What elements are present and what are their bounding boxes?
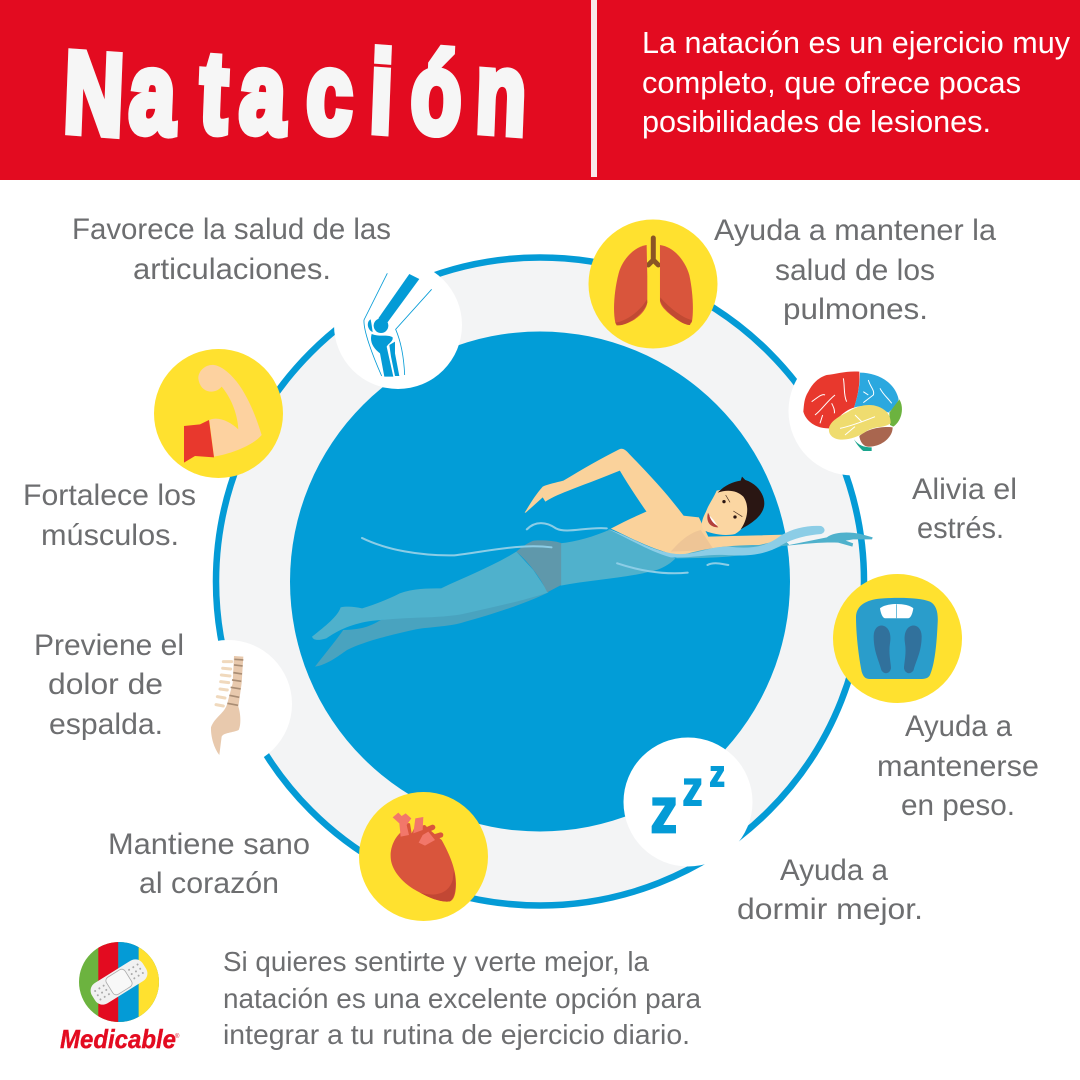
swim trunks: [516, 540, 561, 592]
label: stress: [912, 473, 1017, 545]
label: back pain: dolor de: [48, 668, 163, 701]
logo: Medicable: Medicable: [60, 1024, 176, 1054]
label: muscles: músculos.: [41, 519, 179, 552]
label: weight: mantenerse: [877, 750, 1039, 783]
label: back pain: Previene el: [34, 629, 184, 662]
closing text: Si quieres sentirte y verte mejor, la: [223, 946, 649, 977]
label: muscles: Fortalece los: [23, 479, 196, 512]
icon: spine: [164, 640, 292, 768]
label: heart: Mantiene sano: [108, 828, 310, 861]
torso underwater: [560, 529, 676, 586]
icon: bathroom scale: [833, 574, 962, 703]
label: lungs: [714, 214, 996, 326]
label: heart: al corazón: [139, 867, 279, 900]
icon: lungs: [588, 220, 718, 348]
label: lungs: salud de los: [775, 254, 935, 287]
front leg: [312, 552, 548, 640]
swimmer head: [702, 477, 764, 535]
water ripples: [362, 523, 728, 573]
intro text: [642, 25, 1070, 139]
label: joints: Favorece la salud de las: [72, 213, 391, 246]
label: joints: [72, 213, 391, 286]
water swoosh and extended hand: [676, 533, 873, 558]
label: back pain: [34, 629, 184, 741]
intro text: completo, que ofrece pocas: [642, 65, 1021, 100]
central circle diagram: [216, 258, 864, 906]
header banner: [0, 0, 1080, 180]
label: sleep: Ayuda a: [780, 854, 888, 887]
label: sleep: [737, 854, 923, 926]
icon: sleeping z letters: [624, 738, 752, 866]
label: stress: estrés.: [917, 512, 1004, 545]
intro text: posibilidades de lesiones.: [642, 104, 991, 139]
rear leg: [315, 592, 548, 667]
icon: knee joint: [334, 261, 462, 389]
label: stress: Alivia el: [912, 473, 1017, 506]
label: heart: [108, 828, 310, 900]
icon: heart: [359, 792, 488, 921]
intro text: La natación es un ejercicio muy: [642, 25, 1070, 60]
label: lungs: Ayuda a mantener la: [714, 214, 996, 247]
icon: flexed arm: [154, 349, 283, 478]
raised arm: [525, 449, 684, 519]
title: Natación: [62, 28, 529, 161]
label: weight: Ayuda a: [905, 710, 1012, 743]
chest: [611, 512, 785, 555]
label: lungs: pulmones.: [783, 293, 928, 326]
closing text: natación es una excelente opción para: [223, 983, 701, 1014]
label: joints: articulaciones.: [133, 253, 331, 286]
label: muscles: [23, 479, 196, 552]
label: weight: en peso.: [901, 789, 1015, 822]
icon: brain: [788, 346, 918, 476]
closing text: [223, 946, 701, 1050]
closing text: integrar a tu rutina de ejercicio diario.: [223, 1019, 690, 1050]
logo: Medicable: [60, 942, 180, 1054]
label: sleep: dormir mejor.: [737, 893, 923, 926]
label: back pain: espalda.: [49, 708, 163, 741]
logo: Medicable: ®: [175, 1033, 180, 1040]
swimmer illustration: [312, 449, 873, 667]
label: weight: [877, 710, 1039, 822]
